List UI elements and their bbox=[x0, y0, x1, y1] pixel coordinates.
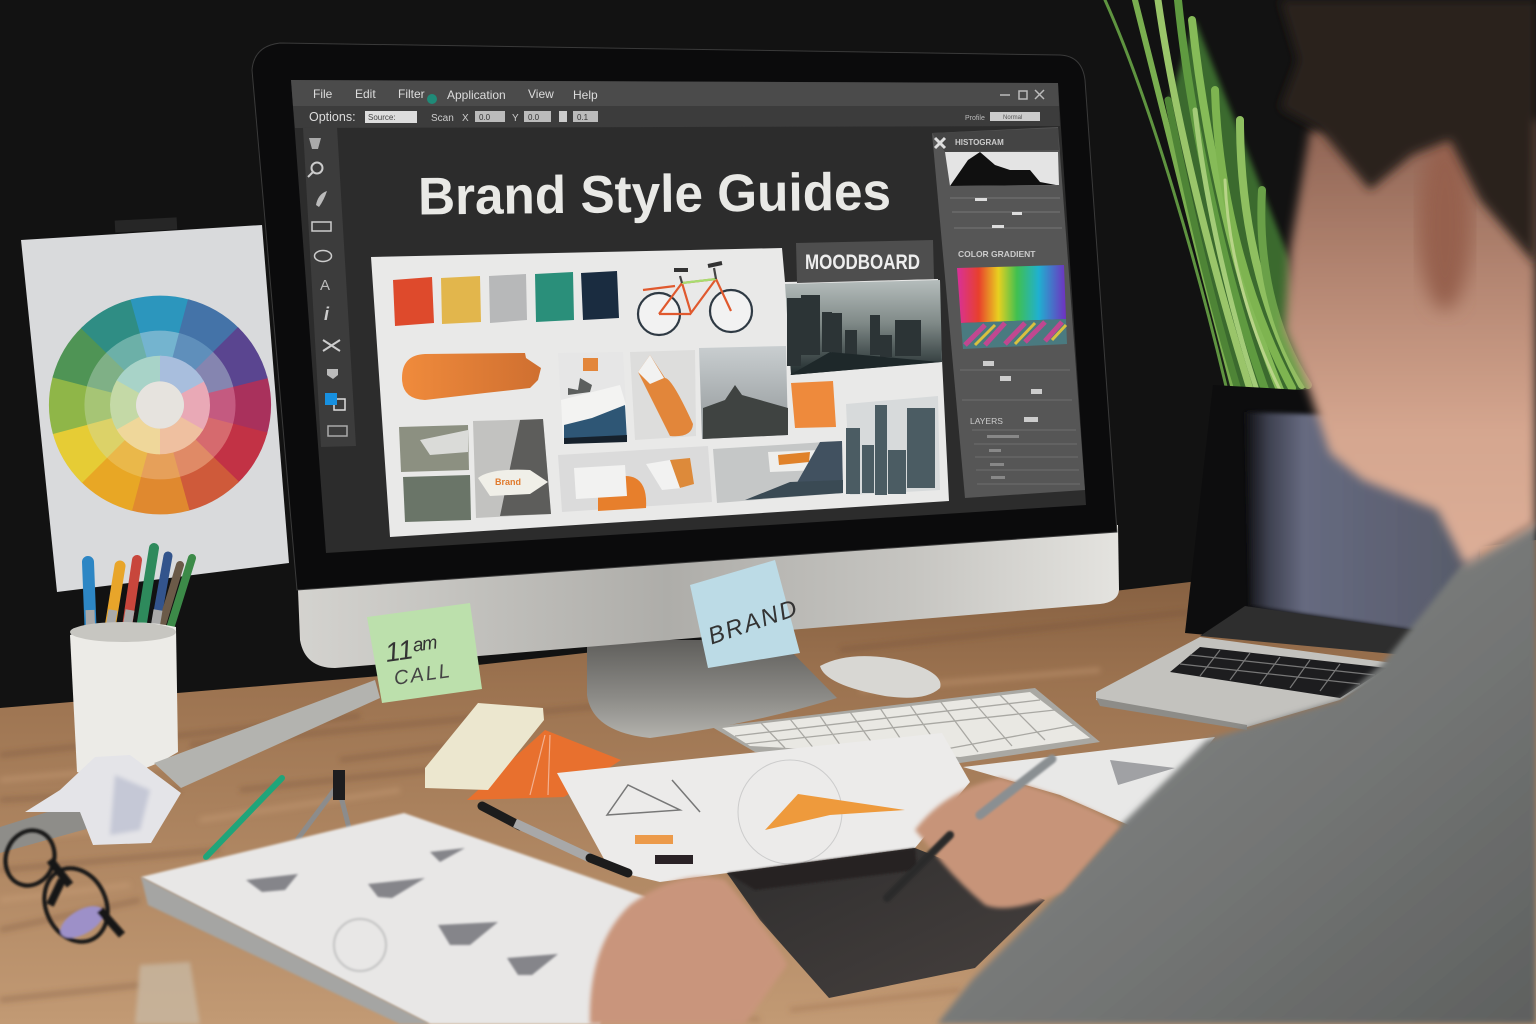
menu bar: X bbox=[462, 113, 469, 124]
plant bbox=[1105, 0, 1310, 425]
right hand bbox=[915, 778, 1120, 908]
tools panel: i bbox=[324, 304, 330, 324]
sketch paper on desk bbox=[557, 733, 970, 882]
green pencil bbox=[206, 778, 282, 857]
moodboard panel bbox=[371, 248, 949, 537]
menu bar: Help bbox=[573, 88, 598, 102]
blurred glass bbox=[135, 962, 200, 1024]
right panels: LAYERS bbox=[970, 416, 1003, 426]
moodboard label bbox=[796, 240, 934, 283]
sticky note: 11am call bbox=[367, 603, 482, 703]
person bbox=[590, 0, 1536, 1024]
drafting compass bbox=[297, 770, 349, 840]
right panels bbox=[932, 127, 1085, 498]
menu bar: Application bbox=[447, 88, 506, 102]
crumpled paper bbox=[25, 755, 181, 845]
swatch fan book bbox=[425, 703, 621, 800]
monitor bbox=[252, 43, 1119, 668]
color wheel bbox=[28, 275, 292, 535]
menu bar: View bbox=[528, 87, 554, 101]
color wheel poster bbox=[21, 217, 292, 592]
menu bar: Profile bbox=[965, 115, 985, 122]
menu bar: 0.1 bbox=[577, 113, 589, 122]
right panels: COLOR GRADIENT bbox=[958, 249, 1036, 259]
pen on desk bbox=[482, 806, 628, 873]
stylus bbox=[887, 759, 1052, 898]
menu bar: Options: bbox=[309, 110, 356, 124]
menu bar: Source: bbox=[368, 113, 396, 122]
screen title: Brand Style Guides bbox=[418, 163, 891, 226]
glasses bbox=[0, 823, 122, 952]
menu bar bbox=[291, 80, 1060, 128]
menu bar: Normal bbox=[1003, 115, 1022, 121]
menu bar: Edit bbox=[355, 87, 376, 101]
head and neck bbox=[1285, 120, 1536, 565]
mouse bbox=[820, 656, 940, 698]
swatches bbox=[393, 277, 434, 326]
right panels: HISTOGRAM bbox=[955, 138, 1004, 147]
cup body bbox=[70, 622, 178, 776]
sweater bbox=[937, 520, 1536, 1024]
menu bar: 0.0 bbox=[479, 113, 491, 122]
left hand bbox=[590, 877, 787, 1024]
sticky note: 11am call: CALL bbox=[393, 660, 453, 690]
moodboard panel: Brand bbox=[495, 477, 521, 487]
bicycle bbox=[638, 263, 752, 335]
keyboard bbox=[712, 688, 1100, 763]
hair bbox=[1280, 0, 1536, 265]
menu bar: File bbox=[313, 87, 333, 101]
monitor chin bbox=[296, 525, 1119, 668]
menu bar: Filter bbox=[398, 87, 425, 101]
spiral notebook bbox=[141, 813, 646, 1024]
tools panel: A bbox=[320, 277, 330, 294]
drawing tablet bbox=[727, 848, 1045, 998]
menu bar: Scan bbox=[431, 113, 454, 124]
sticky note: brand bbox=[690, 560, 802, 668]
monitor bezel bbox=[252, 43, 1117, 590]
monitor stand bbox=[587, 640, 837, 738]
laptop lid bbox=[1185, 385, 1480, 660]
ruler bbox=[0, 680, 380, 853]
sketch paper right bbox=[963, 737, 1215, 830]
pencil cup with markers bbox=[70, 548, 192, 776]
menu bar: 0.0 bbox=[528, 113, 540, 122]
laptop bbox=[1096, 385, 1480, 730]
ear bbox=[1419, 140, 1471, 310]
tools panel bbox=[303, 127, 356, 447]
laptop base bbox=[1096, 637, 1400, 727]
wooden desk bbox=[0, 540, 1536, 1024]
collage images bbox=[558, 352, 628, 444]
screen bbox=[291, 80, 1086, 553]
menu bar: Y bbox=[512, 113, 519, 124]
sticky note: brand: BRAND bbox=[705, 594, 802, 650]
moodboard label: MOODBOARD bbox=[805, 251, 920, 274]
sticky note: 11am call: 11ᵃᵐ bbox=[383, 631, 440, 668]
orange hand shape bbox=[402, 353, 541, 400]
